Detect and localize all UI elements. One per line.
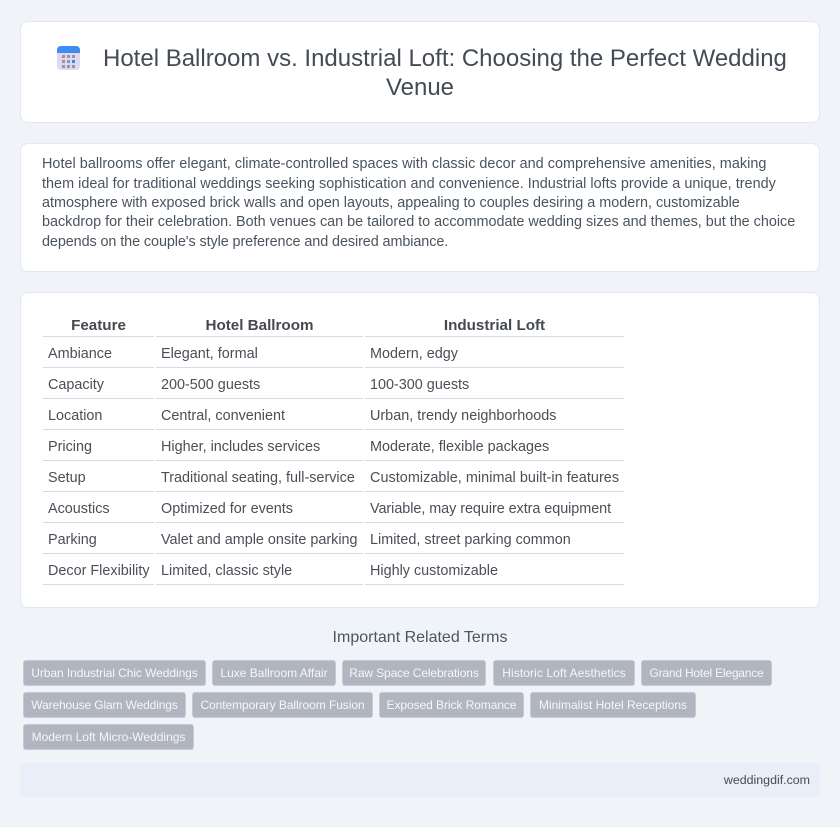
tags: related terms: Warehouse Glam Weddings [31, 698, 178, 712]
comparison table: Capacity [48, 377, 104, 393]
title: Venue [386, 74, 454, 101]
comparison table: Industrial Loft [444, 317, 545, 334]
comparison table: Modern, edgy [370, 346, 458, 362]
heading: related terms: Important Related Terms [333, 629, 507, 646]
text block: summary: depends on the couple's style preference and desired ambiance. [42, 234, 448, 250]
text block: summary: atmosphere with exposed brick walls and open layouts, appealing to couples desiring a modern, customizable [42, 195, 740, 211]
panel: title [20, 21, 820, 123]
panel: summary [20, 143, 820, 272]
tags: related terms: Raw Space Celebrations [349, 666, 479, 680]
comparison table: Feature [71, 317, 126, 334]
comparison table: Valet and ample onsite parking [161, 532, 358, 548]
comparison table: Traditional seating, full-service [161, 470, 355, 486]
tags: related terms: Urban Industrial Chic Weddings [31, 666, 198, 680]
comparison table: Hotel Ballroom [205, 317, 314, 334]
text block: summary [42, 156, 795, 250]
comparison table: Higher, includes services [161, 439, 320, 455]
tags: related terms [23, 660, 772, 750]
panel: comparison table [20, 292, 820, 608]
comparison table: Customizable, minimal built-in features [370, 470, 619, 486]
comparison table: Variable, may require extra equipment [370, 501, 611, 517]
comparison table: Limited, classic style [161, 563, 292, 579]
comparison table [43, 317, 624, 585]
tags: related terms: Grand Hotel Elegance [649, 666, 764, 680]
comparison table: Pricing [48, 439, 92, 455]
comparison table: Setup [48, 470, 86, 486]
comparison table: Optimized for events [161, 501, 293, 517]
tags: related terms: Historic Loft Aesthetics [502, 666, 626, 680]
text block: summary: them ideal for traditional weddings seeking sophistication and convenience. Industrial lofts provide a unique, trendy [42, 176, 776, 192]
comparison table: Limited, street parking common [370, 532, 571, 548]
comparison table: Central, convenient [161, 408, 285, 424]
text block: summary: backdrop for their celebration. Both venues can be tailored to accommodate wedding sizes and themes, but the choice [42, 214, 795, 230]
comparison table: Ambiance [48, 346, 112, 362]
comparison table: Acoustics [48, 501, 110, 517]
title [103, 45, 787, 101]
tags: related terms: Exposed Brick Romance [387, 698, 516, 712]
tags: related terms: Modern Loft Micro-Weddings [32, 730, 185, 744]
title: Hotel Ballroom vs. Industrial Loft: Choosing the Perfect Wedding [103, 45, 787, 72]
tags: related terms: Contemporary Ballroom Fusion [200, 698, 365, 712]
comparison table: Highly customizable [370, 563, 498, 579]
comparison table: 100-300 guests [370, 377, 469, 393]
comparison table: Urban, trendy neighborhoods [370, 408, 556, 424]
icon: calendar [57, 46, 80, 70]
comparison table: 200-500 guests [161, 377, 260, 393]
comparison table: Location [48, 408, 102, 424]
text block: summary: Hotel ballrooms offer elegant, climate-controlled spaces with classic decor and comprehensive amenities, making [42, 156, 766, 172]
comparison table: Parking [48, 532, 97, 548]
tags: related terms: Minimalist Hotel Receptions [539, 698, 687, 712]
footer [20, 763, 820, 797]
footer source text: weddingdif.com [724, 773, 810, 787]
comparison table: Elegant, formal [161, 346, 258, 362]
comparison table: Moderate, flexible packages [370, 439, 549, 455]
tags: related terms: Luxe Ballroom Affair [220, 666, 328, 680]
comparison table: Decor Flexibility [48, 563, 150, 579]
